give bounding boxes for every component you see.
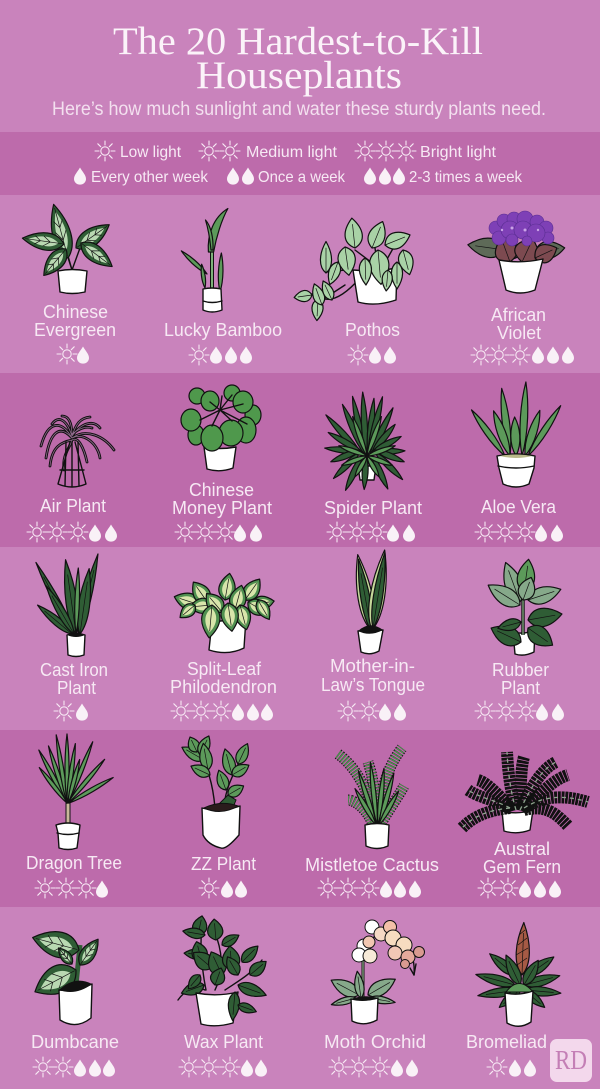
panel: legend band: [0, 132, 600, 195]
legend: 2-3 times a week: [364, 168, 523, 186]
legend: once a week: Once a week: [258, 169, 346, 186]
name: Bromeliad: [466, 1032, 547, 1052]
legend: low light: [95, 141, 182, 161]
title: [113, 20, 483, 97]
title: The 20 Hardest-to-Kill: [113, 20, 483, 63]
name: Violet: [497, 323, 541, 343]
card: Split-Leaf Philodendron: [170, 572, 277, 721]
rating: [318, 878, 421, 898]
rating: [471, 345, 574, 365]
card: Bromeliad: [466, 922, 561, 1077]
plant: Pothos: [293, 217, 416, 321]
rating: [54, 701, 88, 721]
name: Gem Fern: [483, 857, 561, 877]
name: Plant: [501, 678, 540, 698]
rating: [348, 345, 396, 365]
name: Money Plant: [172, 498, 272, 518]
card: ZZ Plant: [179, 734, 256, 898]
name: Dumbcane: [31, 1032, 119, 1052]
card: Dragon Tree: [26, 734, 122, 898]
name: Chinese: [43, 302, 108, 322]
plant: Wax Plant: [178, 914, 270, 1026]
card: Rubber Plant: [475, 558, 564, 721]
legend: bright light: [355, 141, 497, 161]
card: Mother-in-Law's Tongue: [321, 549, 425, 721]
plant: Mother-in-Law's Tongue: [351, 549, 392, 654]
card: Dumbcane: [29, 925, 119, 1077]
card: Pothos: [293, 217, 416, 365]
name: Wax Plant: [184, 1032, 263, 1052]
rating: [338, 701, 406, 721]
card: Air Plant: [27, 416, 117, 542]
plant: Bromeliad: [475, 922, 561, 1026]
name: Mistletoe Cactus: [305, 855, 439, 875]
card: Chinese Money Plant: [172, 385, 272, 542]
plant: Moth Orchid: [328, 920, 424, 1024]
plant: Cast Iron Plant: [33, 553, 102, 656]
rating: [33, 1057, 115, 1077]
legend: medium light: Medium light: [246, 144, 338, 161]
legend: every other week: Every other week: [91, 169, 209, 186]
name: [491, 305, 546, 343]
name: Plant: [57, 678, 96, 698]
name: [492, 660, 549, 698]
plant: Chinese Evergreen: [21, 202, 117, 294]
plant: Aloe Vera: [469, 382, 563, 487]
logo: RD badge: RD: [555, 1045, 587, 1075]
rating: [487, 1057, 536, 1077]
rating: [179, 1057, 267, 1077]
plant: Dumbcane: [29, 925, 104, 1025]
card: Austral Gem Fern: [462, 752, 588, 898]
name: African: [491, 305, 546, 325]
card: Mistletoe Cactus: [305, 748, 439, 898]
subtitle: Here’s how much sunlight and water these sturdy plants need.: [52, 99, 546, 120]
legend: once a week: [227, 168, 346, 186]
name: Air Plant: [40, 496, 106, 516]
logo: RD badge: [550, 1039, 592, 1082]
panel: row 2 band: [0, 373, 600, 547]
card: Chinese Evergreen: [21, 202, 117, 364]
plant: Mistletoe Cactus: [338, 748, 404, 848]
rating: [171, 701, 273, 721]
name: ZZ Plant: [191, 854, 256, 874]
name: Lucky Bamboo: [164, 320, 282, 340]
legend: [74, 141, 523, 186]
plant: African Violet: [467, 211, 566, 293]
plant: Spider Plant: [324, 392, 405, 492]
name: [483, 839, 561, 877]
panel: row 4 band: [0, 730, 600, 907]
rating: [329, 1057, 418, 1077]
name: [321, 656, 425, 695]
plant: Split-Leaf Philodendron: [172, 572, 275, 653]
card: Moth Orchid: [324, 920, 426, 1077]
legend: bright light: Bright light: [420, 144, 497, 161]
name: Moth Orchid: [324, 1032, 426, 1052]
name: Rubber: [492, 660, 549, 680]
plant: Rubber Plant: [484, 558, 564, 655]
name: [170, 659, 277, 697]
plant: Chinese Money Plant: [181, 385, 261, 471]
name: Austral: [494, 839, 550, 859]
card: Wax Plant: [178, 914, 270, 1077]
rating: [475, 522, 563, 542]
card: Cast Iron Plant: [33, 553, 108, 721]
name: [40, 660, 108, 698]
name: [34, 302, 116, 340]
name: Cast Iron: [40, 660, 108, 680]
rating: [478, 878, 561, 898]
legend: medium light: [199, 141, 338, 161]
card: Aloe Vera: [469, 382, 563, 542]
legend: low light: Low light: [120, 144, 182, 161]
name: Aloe Vera: [481, 497, 557, 517]
legend: 2-3 times a week: 2-3 times a week: [409, 169, 523, 186]
title: Houseplants: [196, 54, 402, 97]
name: Pothos: [345, 320, 400, 340]
rating: [57, 344, 89, 364]
rating: [175, 522, 262, 542]
name: Mother-in-: [330, 656, 415, 676]
plant: ZZ Plant: [179, 734, 253, 848]
rating: [199, 878, 247, 898]
rating: [35, 878, 108, 898]
plant: Dragon Tree: [37, 734, 114, 850]
plant: Lucky Bamboo: [180, 208, 228, 312]
card: African Violet: [467, 211, 574, 365]
rating: [189, 345, 252, 365]
card: Spider Plant: [324, 392, 422, 542]
name: Law’s Tongue: [321, 675, 425, 695]
name: Evergreen: [34, 320, 116, 340]
name: Chinese: [189, 480, 254, 500]
rating: [27, 522, 117, 542]
name: [172, 480, 272, 518]
rating: [327, 522, 415, 542]
name: Dragon Tree: [26, 853, 122, 873]
name: Spider Plant: [324, 498, 422, 518]
plant: Air Plant: [41, 416, 114, 487]
name: Philodendron: [170, 677, 277, 697]
card: Lucky Bamboo: [164, 208, 282, 365]
plant: Austral Gem Fern: [462, 752, 588, 833]
name: Split-Leaf: [187, 659, 262, 679]
rating: [475, 701, 564, 721]
